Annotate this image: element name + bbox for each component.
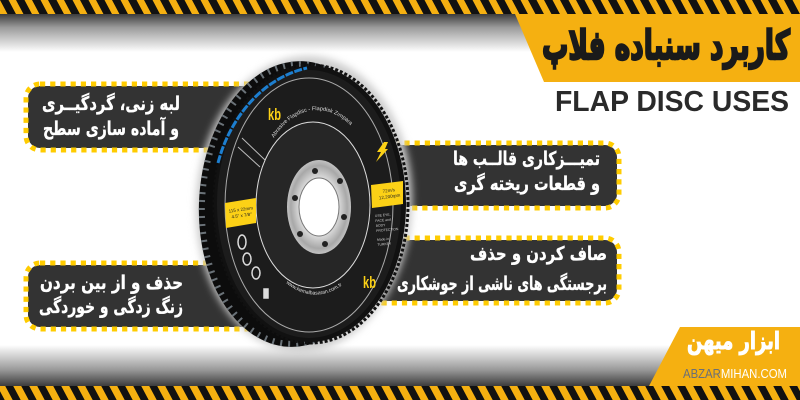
- safety notes text: USE EYE,: [375, 213, 391, 218]
- callout text: صاف کردن و حذف: [470, 243, 607, 265]
- safety notes text: Made in: [377, 237, 389, 242]
- left label text: 115 x 22mm: [228, 205, 253, 214]
- safety notes text: BODY: [376, 223, 386, 228]
- flange bolts: [292, 168, 347, 247]
- logo banner: [649, 327, 800, 386]
- callout: smoothing weld burrs: [370, 238, 619, 303]
- right label text: 72m/s: [382, 187, 395, 194]
- centre hole: [299, 178, 339, 236]
- callout text: حذف و از بین بردن: [40, 272, 183, 294]
- callout text: تمیـــزکاری قالــب ها: [453, 148, 600, 170]
- callout text line 2: برجستگی های ناشی از جوشکاری: [397, 272, 607, 295]
- title banner: [515, 14, 800, 82]
- side flaps teeth: [195, 59, 397, 349]
- bottom shadow gradient: [0, 345, 800, 386]
- top hazard stripe: [0, 0, 800, 14]
- disc side body: [192, 56, 400, 352]
- right label text: 12,200rpm: [379, 192, 401, 200]
- website url: ABZARMIHAN.COM: [683, 367, 787, 381]
- bottom hazard stripe: [0, 386, 800, 400]
- flap disc product: [192, 52, 418, 352]
- yellow label left: [225, 198, 256, 228]
- callout text line 2: زنگ زدگی و خوردگی: [39, 295, 183, 318]
- curved brand text: Abrasive Flapdisc - Flapdisk Zımpara: [272, 106, 352, 138]
- outer white ring: [225, 78, 393, 332]
- callout text: لبه زنی، گردگیــری: [42, 92, 180, 115]
- center hub: [256, 122, 370, 288]
- safety notes text: PROTECTION: [376, 227, 399, 233]
- english title: FLAP DISC USES: [555, 86, 789, 118]
- icon: lightning bolt: [376, 142, 388, 162]
- logo kb bottom: kb: [363, 273, 376, 292]
- top shadow gradient: [0, 14, 800, 52]
- safety icons: [238, 235, 268, 298]
- callout: removing rust and corrosion: [26, 263, 276, 329]
- blue backing arc: [218, 68, 307, 163]
- callout text line 2: و آماده سازی سطح: [43, 116, 179, 140]
- callout: cleaning moulds and castings: [370, 143, 619, 208]
- left label text: 4.5" x 7/8": [231, 212, 252, 219]
- panel dividers: [238, 138, 265, 167]
- disc teeth: [214, 65, 408, 343]
- safety notes text: FACE and: [375, 218, 391, 223]
- disc teeth base: [214, 66, 406, 342]
- website text: www.kemalbasaran.com.tr: [286, 280, 342, 295]
- yellow label right: [371, 181, 403, 208]
- logo kb top: kb: [268, 105, 281, 124]
- disc glow: [188, 51, 420, 357]
- metal flange: [287, 160, 351, 254]
- safety notes text: TURKEY: [377, 242, 392, 247]
- callout text line 2: و قطعات ریخته گری: [454, 172, 600, 195]
- disc face: [217, 70, 401, 338]
- callout: edge removal and surface prep: [26, 84, 276, 150]
